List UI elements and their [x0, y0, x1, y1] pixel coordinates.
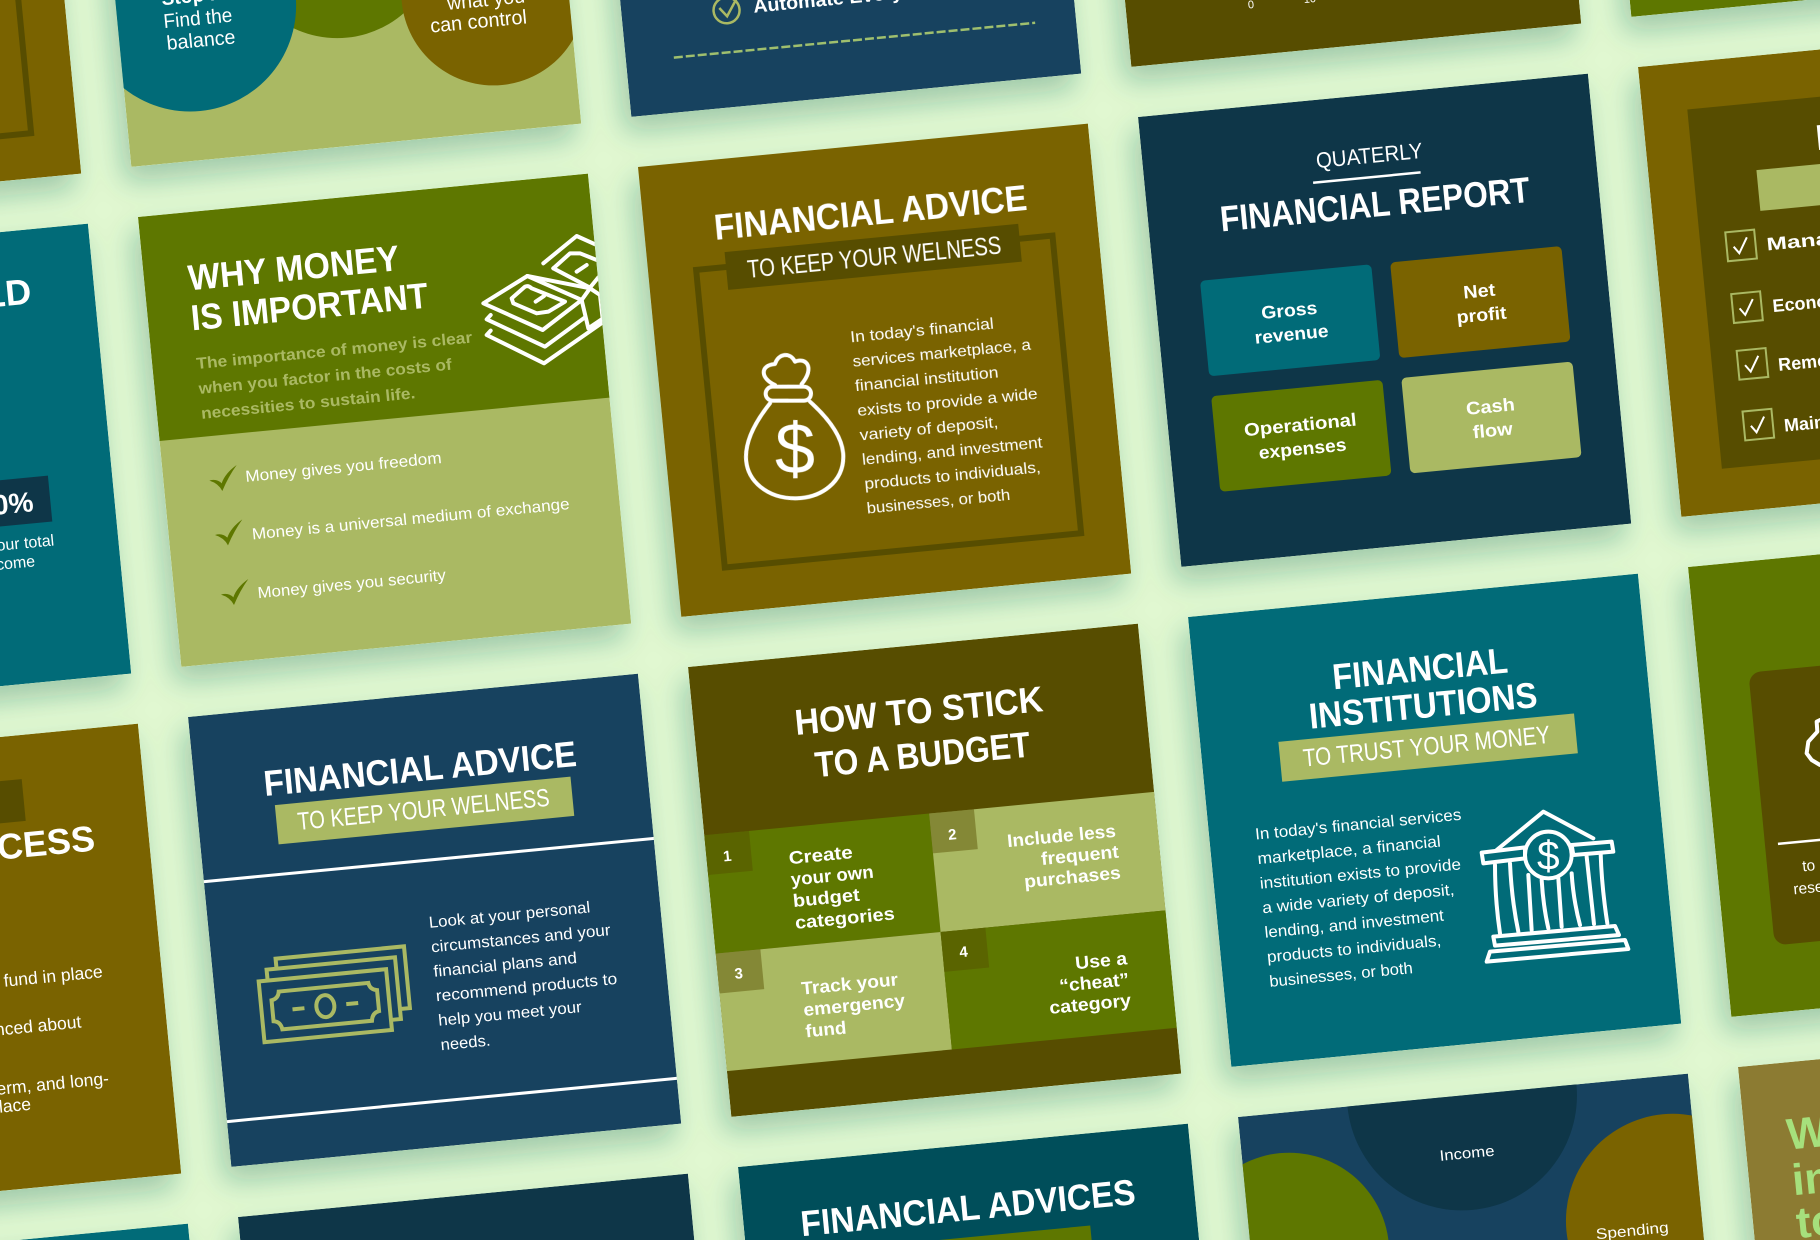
heading: FINANCIAL ADVICE [712, 177, 1029, 248]
panel: brown card top left [0, 0, 82, 182]
panel: teal card left [0, 224, 131, 717]
tile: operational expenses: expenses [1258, 435, 1347, 463]
text block: Look at your personal [428, 899, 591, 932]
step 4: 4 [959, 943, 969, 961]
panel: teal card bottom left [0, 1224, 231, 1240]
panel: success brown card left [0, 724, 181, 1217]
text block: financial plans and [433, 950, 578, 981]
step 3: emergency [802, 990, 906, 1020]
ribbon: TO TRUST YOUR MONEY [1302, 721, 1552, 773]
step 3: fund [805, 1018, 847, 1041]
text block: businesses, or both [1269, 960, 1414, 991]
step 2: frequent [1040, 842, 1120, 869]
step 4 [941, 910, 1177, 1049]
text block [850, 312, 1048, 518]
step 2: purchases [1023, 863, 1122, 892]
step 3: 3 [734, 965, 744, 983]
icon: money bag: $ [775, 409, 815, 489]
icon: bank notes [257, 946, 412, 1042]
panel: find the balance circles: Find the [163, 5, 233, 33]
step 2: 2 [947, 826, 957, 844]
text block: recommend products to [435, 971, 618, 1005]
panel: financial advice brown [638, 124, 1131, 617]
heading [1304, 637, 1539, 737]
panel: financial advices [738, 1124, 1231, 1240]
heading [186, 246, 427, 330]
text block [428, 897, 623, 1054]
tile: gross revenue: revenue [1254, 321, 1329, 348]
step 4: Use a [1074, 948, 1129, 973]
panel: dark olive chart card [1088, 0, 1581, 67]
text block [1254, 807, 1476, 991]
heading: FINANCIAL ADVICE [262, 733, 578, 804]
text block: marketplace, a financial [1257, 834, 1442, 868]
panel: green card right [1688, 524, 1820, 1017]
step 2 [929, 792, 1166, 932]
ribbon: TO KEEP YOUR WELNESS [746, 232, 1003, 284]
text block: products to individuals, [1266, 933, 1442, 966]
heading [796, 686, 1044, 776]
ribbon: TO KEEP YOUR WELNESS [296, 784, 551, 836]
step 1: categories [794, 903, 896, 933]
tile: gross revenue [1200, 264, 1380, 376]
text block: intro: when you factor in the costs of [197, 357, 453, 398]
check list: Money gives you security [257, 567, 447, 602]
subtitle: QUATERLY [1315, 138, 1424, 173]
text block: intro: The importance of money is clear [196, 330, 473, 373]
heading: HOW TO STICK [793, 678, 1045, 743]
step 1: 1 [722, 848, 732, 865]
tile: cash flow: flow [1472, 418, 1515, 442]
panel: find the balance circles: can control [429, 6, 528, 38]
text block: In today's financial services [1254, 807, 1462, 844]
icon: check marks [209, 465, 248, 605]
step 1: your own [790, 862, 874, 890]
text block: needs. [440, 1033, 491, 1054]
heading: FINANCIAL REPORT [1218, 169, 1532, 240]
text block: variety of deposit, [859, 414, 999, 444]
tile: net profit: profit [1456, 303, 1507, 327]
panel: quarterly financial report [1138, 74, 1631, 567]
icon: outline partial [1807, 720, 1820, 770]
checklist [1725, 214, 1820, 440]
text block: financial institution [854, 365, 999, 395]
step 3: Track your [800, 969, 899, 999]
text block: services marketplace, a [852, 337, 1032, 371]
text block: a wide variety of deposit, [1261, 882, 1455, 917]
heading: FINANCIAL [1330, 640, 1510, 697]
panel: navy card bottom [238, 1174, 731, 1240]
panel: financial advice blue [186, 673, 683, 1167]
panel: income and spending circles: Income [1439, 1143, 1495, 1165]
step 1: Create [788, 842, 853, 868]
heading: WHY MONEY [186, 237, 401, 298]
panel: income and spending circles [1165, 952, 1809, 1240]
panel: checklist brown card right [1638, 24, 1820, 517]
panel: financial institutions [1188, 574, 1681, 1067]
heading: INSTITUTIONS [1307, 674, 1539, 737]
check list: Money gives you freedom [245, 450, 442, 486]
tile: cash flow: Cash [1465, 394, 1516, 419]
text block: circumstances and your [430, 922, 612, 956]
tile: gross revenue: Gross [1260, 298, 1318, 323]
step 2: Include less [1006, 821, 1117, 851]
tile: net profit [1390, 246, 1571, 358]
icon: money bag [746, 355, 843, 498]
text block: lending, and investment [861, 435, 1044, 469]
check list: Money is a universal medium of exchange [251, 496, 570, 543]
icon: check circle [712, 0, 741, 24]
panel: light brown card [1738, 1024, 1820, 1240]
step 4: “cheat” [1058, 969, 1130, 996]
text block: intro: necessities to sustain life. [200, 385, 416, 423]
step 1: budget [792, 885, 861, 911]
step 3 [716, 932, 952, 1071]
icon: bank [1482, 812, 1628, 962]
heading: IS IMPORTANT [189, 275, 430, 338]
panel: how to stick to a budget [688, 624, 1181, 1117]
heading: TO A BUDGET [813, 724, 1032, 785]
text block: exists to provide a wide [857, 386, 1039, 420]
text block: intro [196, 334, 472, 419]
text block: institution exists to provide [1259, 856, 1462, 893]
text block: help you meet your [438, 999, 583, 1030]
panel: automate checklist card [588, 0, 1081, 117]
tile: operational expenses: Operational [1243, 409, 1357, 440]
tile: cash flow [1401, 361, 1582, 474]
panel: find the balance circles: balance [166, 26, 236, 55]
tile: operational expenses [1211, 380, 1392, 492]
text block: lending, and investment [1264, 908, 1445, 942]
panel: green card top right [1630, 0, 1806, 17]
step 1 [704, 814, 941, 954]
icon: bank: $ [1537, 832, 1560, 878]
tile: net profit: Net [1462, 280, 1496, 303]
icon: money stack [483, 236, 603, 363]
panel: why money is important [138, 173, 641, 667]
step 4: category [1048, 990, 1132, 1018]
text block: businesses, or both [866, 487, 1011, 518]
check list [210, 454, 569, 605]
panel: find the balance circles [115, 0, 582, 167]
text block: In today's financial [850, 316, 995, 346]
text block: products to individuals, [864, 459, 1042, 493]
